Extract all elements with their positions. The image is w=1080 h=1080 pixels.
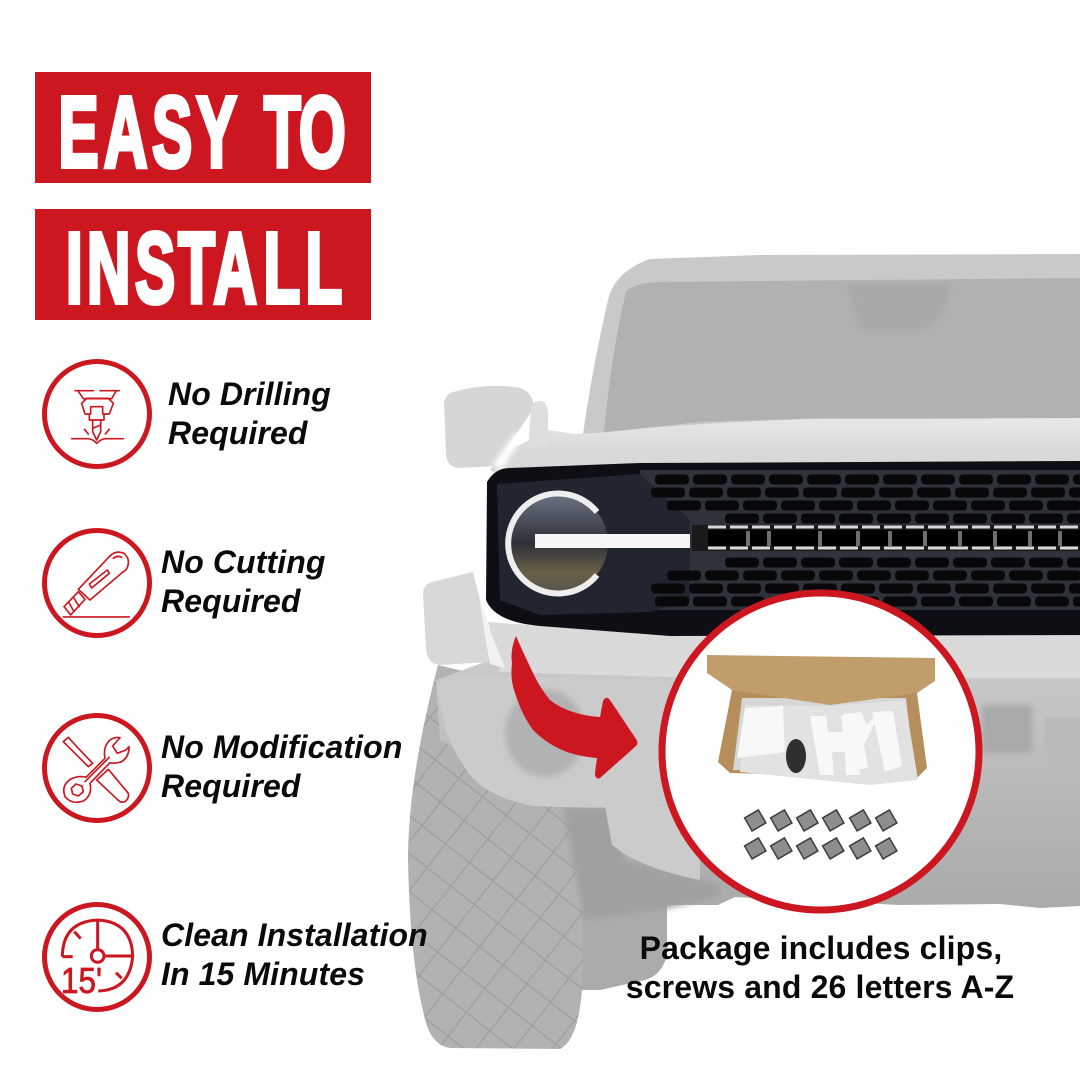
grille panel: [486, 461, 1080, 636]
text: no drilling: Required: [168, 415, 309, 451]
caption: package includes: Package includes clips,: [640, 930, 1002, 966]
text: no drilling: No Drilling: [168, 376, 331, 412]
arrow: to package: [511, 636, 638, 778]
mirror stalk: [528, 401, 548, 448]
upper bumper strip: [488, 622, 1080, 678]
title line two: INSTALL: [66, 213, 342, 324]
title band: install: [35, 209, 371, 324]
grille mesh backing: [640, 470, 1080, 610]
rear tire: [575, 890, 667, 990]
clock label: 15': [61, 960, 102, 1001]
feature: no cutting: [44, 530, 326, 636]
grille slots: [650, 473, 1080, 608]
title line one: EASY TO: [58, 77, 346, 188]
cardboard box: [707, 655, 935, 778]
text: clean installation: In 15 Minutes: [161, 956, 365, 992]
headlight surround: [497, 474, 690, 615]
right bumper vent: [982, 705, 1032, 753]
daytime running bar: [535, 534, 690, 548]
title band: easy to: [35, 72, 371, 188]
fender highlight: [478, 590, 505, 668]
hood: [490, 418, 1080, 476]
letter samples: [737, 706, 902, 775]
screws: [786, 739, 806, 773]
clips: [745, 810, 897, 859]
rear view mirror: [848, 285, 950, 330]
a-pillar glare: [492, 432, 520, 470]
icon: 15 minute clock: [44, 904, 150, 1010]
windshield: [604, 278, 1080, 432]
text: no modification: Required: [161, 768, 302, 804]
underbody shadow: [563, 806, 720, 920]
truck photo, faded: [408, 254, 1080, 1049]
icon: crossed tools: [44, 716, 150, 820]
callout circle: package contents: [662, 593, 979, 910]
fog lamp recess: [505, 689, 585, 777]
text: clean installation: Clean Installation: [161, 917, 428, 953]
feature: no modification: [44, 716, 402, 820]
cab roof: [583, 254, 1080, 440]
circle frame: [662, 593, 979, 910]
light bar: [692, 525, 1080, 551]
plastic wrap: [740, 700, 918, 785]
bumper end cap: [437, 676, 680, 808]
text: no cutting: No Cutting: [161, 544, 326, 580]
feature: clean installation: [44, 904, 428, 1010]
text: no modification: No Modification: [161, 729, 402, 765]
feature: no drilling: [44, 362, 331, 466]
right tow mount: [1045, 717, 1080, 772]
lower body: [436, 630, 1080, 912]
skid plate: [605, 806, 700, 880]
caption: package includes: screws and 26 letters A-Z: [626, 969, 1014, 1005]
headlight: [508, 493, 608, 594]
fender: [423, 572, 490, 665]
front tire: [408, 665, 584, 1049]
text: no cutting: Required: [161, 583, 302, 619]
side mirror: [444, 386, 534, 468]
icon: utility knife: [44, 530, 150, 636]
icon: drill: [44, 362, 150, 466]
